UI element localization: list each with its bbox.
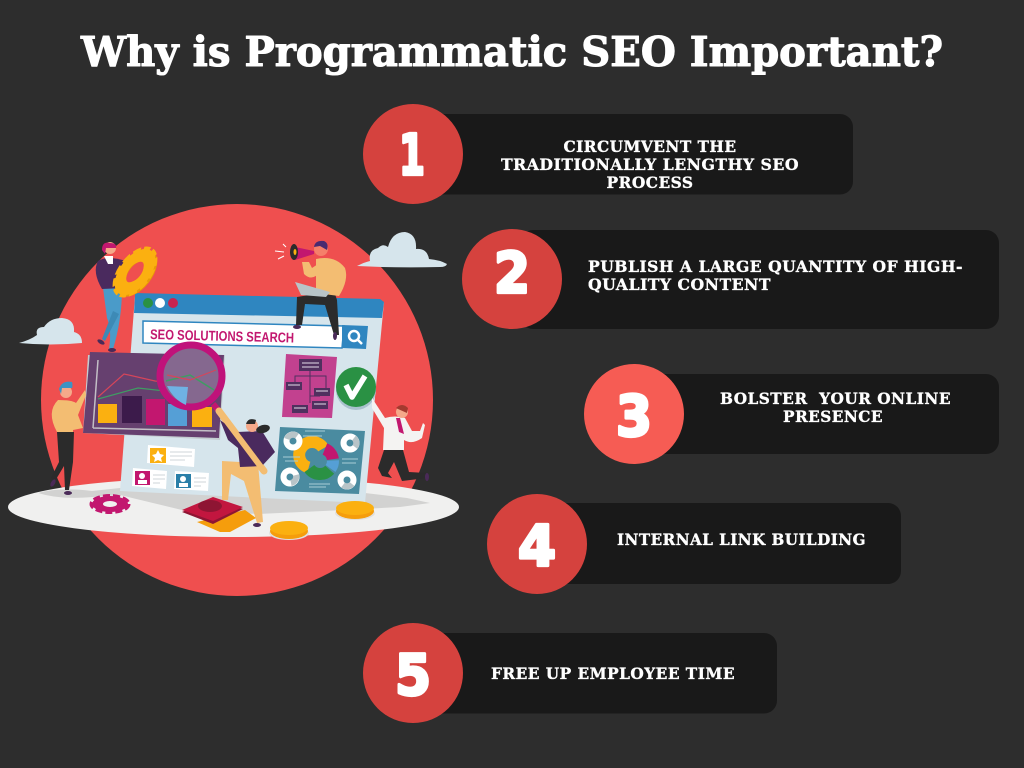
- bar 2: [520, 230, 999, 329]
- platform shadows: [38, 488, 430, 514]
- star card: [147, 445, 195, 467]
- item 1 text: PROCESS: [606, 173, 694, 192]
- cheering person: [372, 398, 429, 481]
- window dots: [143, 298, 178, 308]
- bar 3: [640, 374, 999, 454]
- item 2 text: [588, 257, 963, 294]
- number circle 1: [363, 104, 463, 204]
- number 3: 3: [616, 384, 652, 450]
- analytics chart panel: [83, 352, 225, 440]
- item 4: [487, 494, 901, 594]
- bar 4: [545, 503, 901, 584]
- icon: megaphone: [275, 244, 314, 260]
- search bar: SEO SOLUTIONS SEARCH: [150, 326, 294, 346]
- icon: yellow gear: [107, 242, 163, 302]
- icon: magenta gear: [91, 496, 129, 512]
- number 1: 1: [399, 124, 425, 188]
- item 1: [363, 104, 853, 204]
- item 3 text: [720, 389, 951, 426]
- title: Why is Programmatic SEO Important?: [80, 28, 943, 76]
- profile card magenta: [132, 468, 167, 489]
- person with megaphone: [275, 241, 346, 340]
- coin left: [269, 521, 309, 540]
- person with gear: [96, 242, 163, 352]
- check badge: [336, 367, 376, 410]
- item 5 text: FREE UP EMPLOYEE TIME: [491, 664, 735, 683]
- number circle 3: [584, 364, 684, 464]
- number 2: 2: [494, 242, 530, 306]
- window title bar: [134, 293, 384, 318]
- number circle 2: [462, 229, 562, 329]
- item 5: [363, 623, 777, 723]
- browser window: [120, 293, 384, 503]
- search bar: [143, 321, 368, 349]
- map tile red with pin: [182, 497, 243, 524]
- magnifying glass: [160, 345, 264, 471]
- illustration: SEO team around browser window: [8, 204, 459, 596]
- item 4 text: INTERNAL LINK BUILDING: [617, 530, 866, 549]
- map tile yellow: [197, 510, 256, 532]
- cloud left: [19, 318, 82, 344]
- flowchart panel: [282, 354, 337, 418]
- profile card blue: [174, 471, 209, 491]
- person holding chart: [49, 382, 86, 495]
- item 2 text: PUBLISH A LARGE QUANTITY OF HIGH-: [588, 257, 963, 276]
- window body: [120, 296, 384, 503]
- item 1 text: CIRCUMVENT THE: [564, 137, 736, 156]
- item 2: [462, 229, 999, 329]
- item 3 text: PRESENCE: [783, 407, 883, 426]
- bar 5: [420, 633, 777, 714]
- number circle 4: [487, 494, 587, 594]
- person holding magnifier: [219, 411, 275, 527]
- number 5: 5: [395, 644, 431, 708]
- item 1 text: [501, 137, 799, 192]
- cloud right: [357, 232, 447, 267]
- item 1 text: TRADITIONALLY LENGTHY SEO: [501, 155, 799, 174]
- item 2 text: QUALITY CONTENT: [588, 275, 771, 294]
- item 3 text: BOLSTER YOUR ONLINE: [720, 389, 951, 408]
- platform ellipse: [8, 477, 459, 537]
- pie chart panel: [275, 427, 365, 494]
- number 4: 4: [518, 514, 556, 580]
- item 3: [584, 364, 999, 464]
- number circle 5: [363, 623, 463, 723]
- bar 1: [420, 114, 853, 194]
- red background circle: [41, 204, 433, 596]
- coin right: [335, 501, 375, 520]
